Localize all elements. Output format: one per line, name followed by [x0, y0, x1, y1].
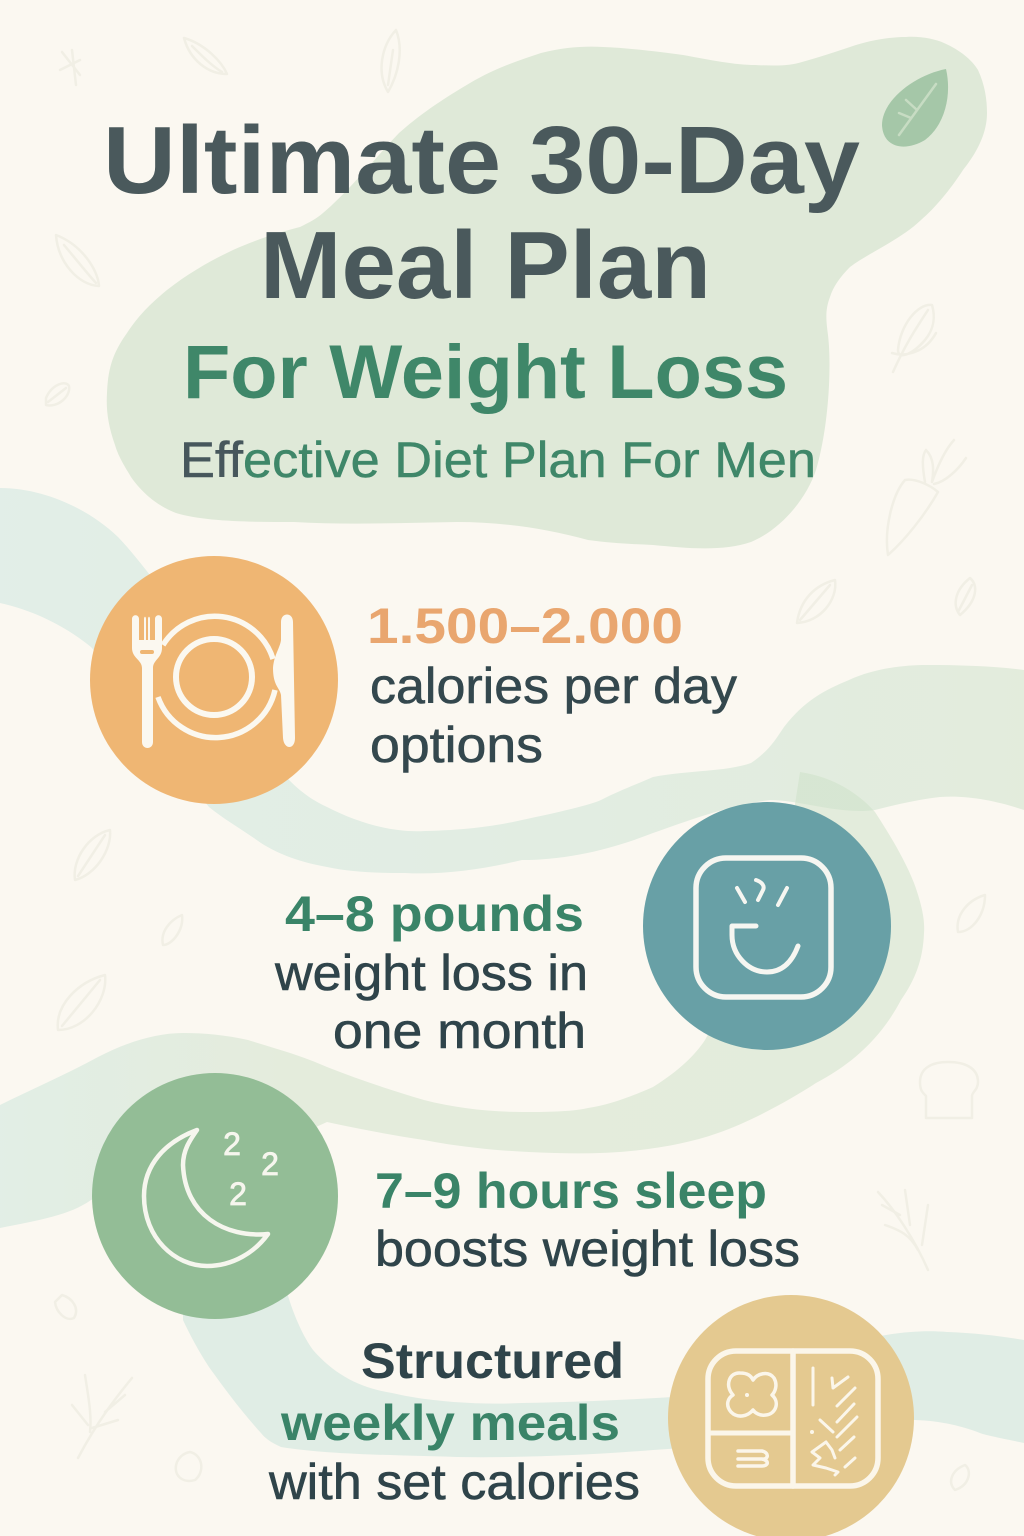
- text: with set calories: with set calories: [268, 1454, 640, 1510]
- icon: moon with z letters: 2: [223, 1126, 241, 1162]
- feature: sleep: [92, 1073, 800, 1319]
- text: weight loss in: weight loss in: [274, 945, 588, 1001]
- text: options: options: [370, 717, 543, 773]
- stat: 1.500-2.000: 1.500–2.000: [367, 598, 683, 654]
- text: one month: one month: [333, 1003, 586, 1059]
- feature: weight loss: [274, 802, 891, 1059]
- title: Meal Plan: Meal Plan: [260, 212, 711, 319]
- feature: weekly meals: [268, 1295, 914, 1536]
- text: Structured: Structured: [361, 1333, 624, 1389]
- background blob behind title: [107, 37, 987, 548]
- icon: green leaf badge: [882, 69, 948, 147]
- stat: 4-8 pounds: 4–8 pounds: [285, 886, 584, 942]
- subtitle: For Weight Loss: For Weight Loss: [183, 330, 788, 415]
- title: Ultimate 30-Day: Ultimate 30-Day: [103, 107, 860, 214]
- icon: moon with z letters: 2: [261, 1146, 279, 1182]
- icon: meal prep container: [668, 1295, 914, 1536]
- feature: calories: [90, 556, 737, 804]
- text: calories per day: calories per day: [370, 658, 737, 714]
- stat: 7-9 hours sleep: 7–9 hours sleep: [375, 1163, 767, 1219]
- stat: weekly meals: weekly meals: [280, 1395, 620, 1451]
- icon: smiling square: [643, 802, 891, 1050]
- icon: moon with z letters: [92, 1073, 338, 1319]
- icon: plate with fork and knife: [90, 556, 338, 804]
- tagline: Effective Diet Plan For Men: Effective Diet Plan For Men: [180, 432, 816, 488]
- text: boosts weight loss: boosts weight loss: [375, 1221, 800, 1277]
- background ribbon: upper wave: [0, 488, 1024, 873]
- background ribbon: middle wave: [0, 772, 924, 1228]
- icon: moon with z letters: 2: [229, 1176, 247, 1212]
- background ribbon: lower wave: [183, 1285, 1024, 1457]
